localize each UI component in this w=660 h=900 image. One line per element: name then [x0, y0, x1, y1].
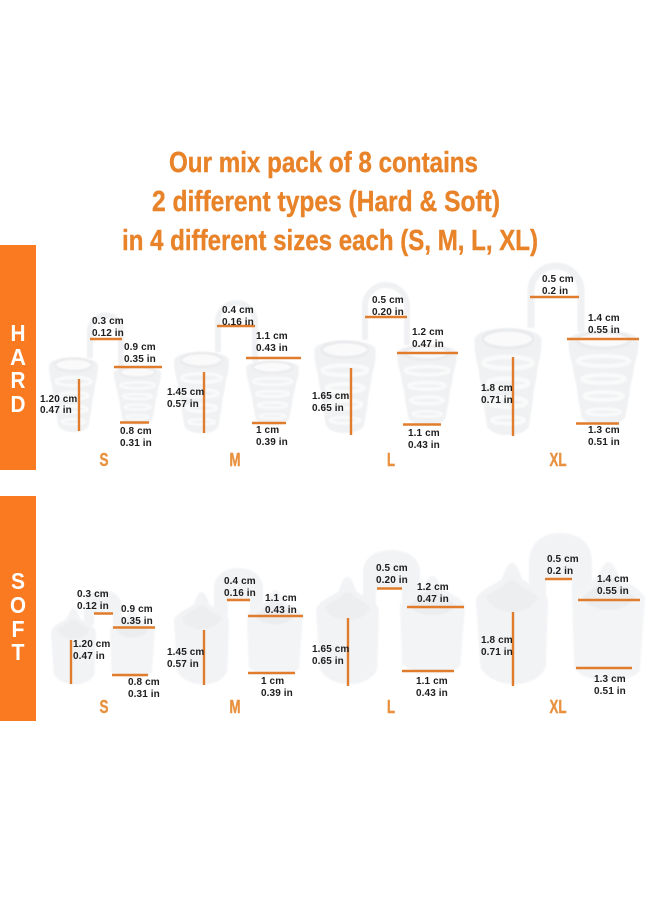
panel: SOFT side label: T	[12, 639, 24, 665]
size label: soft L: L	[387, 697, 395, 717]
size label: XL: XL	[550, 450, 566, 470]
dimensions: hard S: 0.3 cm	[92, 316, 124, 327]
dimensions: hard L: 0.65 in	[312, 403, 344, 414]
dimensions: hard M: 0.43 in	[256, 343, 288, 354]
panel: SOFT side label: S	[11, 568, 25, 594]
dimensions: soft M	[167, 576, 303, 699]
dimensions: hard M: 0.16 in	[222, 317, 254, 328]
dimensions: hard S: 0.9 cm	[124, 342, 156, 353]
dimensions: soft M: 0.43 in	[265, 605, 297, 616]
title: 2 different types (Hard & Soft)	[152, 186, 500, 218]
dimensions: hard XL: 1.8 cm	[481, 383, 513, 394]
dimensions: soft M: 0.16 in	[224, 588, 256, 599]
icon: hard L device	[314, 285, 457, 433]
dimensions: hard L	[312, 295, 458, 451]
dimensions: soft XL: 1.8 cm	[481, 635, 513, 646]
icon: hard M device	[174, 303, 299, 433]
panel: HARD side label: A	[10, 344, 26, 370]
dimensions: soft S: 0.9 cm	[121, 604, 153, 615]
dimensions: soft S: 0.12 in	[77, 601, 109, 612]
dimensions: hard L: 0.43 in	[408, 440, 440, 451]
panel: SOFT side label: F	[12, 616, 24, 642]
dimensions: hard L: 1.1 cm	[408, 428, 440, 439]
dimensions: soft M: 0.39 in	[261, 688, 293, 699]
panel: hard size S	[40, 315, 162, 470]
panel: hard size M	[167, 303, 301, 470]
dimensions: soft L	[312, 563, 464, 699]
dimensions: soft L: 0.65 in	[312, 656, 344, 667]
dimensions: hard XL	[481, 274, 639, 448]
dimensions: hard XL: 1.4 cm	[588, 313, 620, 324]
dimensions: hard S: 0.8 cm	[120, 426, 152, 437]
dimensions: hard XL: 0.51 in	[588, 437, 620, 448]
size label: soft M: M	[230, 697, 240, 717]
icon: hard S device	[49, 315, 161, 432]
dimensions: hard M: 1 cm	[256, 425, 279, 436]
dimensions: soft S: 1.20 cm	[73, 639, 110, 650]
icon: soft XL device	[476, 533, 645, 684]
dimensions: hard M: 0.39 in	[256, 437, 288, 448]
dimensions: soft S: 0.47 in	[73, 651, 105, 662]
dimensions: hard S: 0.35 in	[124, 354, 156, 365]
dimensions: hard XL: 0.71 in	[481, 395, 513, 406]
size label: soft S: S	[100, 697, 108, 717]
dimensions: hard L: 0.20 in	[372, 307, 404, 318]
dimensions: soft XL: 0.71 in	[481, 647, 513, 658]
dimensions: soft XL: 0.5 cm	[547, 554, 579, 565]
dimensions: soft XL: 0.2 in	[547, 566, 573, 577]
size label: L: L	[387, 450, 395, 470]
panel: soft size M	[167, 568, 303, 717]
dimensions: soft S: 0.3 cm	[77, 589, 109, 600]
dimensions: hard M: 0.57 in	[167, 399, 199, 410]
dimensions: hard M: 1.45 cm	[167, 387, 204, 398]
dimensions: hard M: 1.1 cm	[256, 331, 288, 342]
dimensions: hard L: 1.65 cm	[312, 391, 349, 402]
dimensions: soft XL: 1.3 cm	[594, 674, 626, 685]
panel: soft size S	[51, 589, 160, 717]
panel: HARD side label: H	[10, 320, 26, 346]
dimensions: hard M: 0.4 cm	[222, 305, 254, 316]
dimensions: soft L: 1.2 cm	[417, 582, 449, 593]
icon: soft M device	[174, 568, 303, 684]
dimensions: soft L: 1.1 cm	[416, 676, 448, 687]
dimensions: soft L: 0.20 in	[376, 575, 408, 586]
dimensions: soft L: 0.5 cm	[376, 563, 408, 574]
title: in 4 different sizes each (S, M, L, XL)	[122, 225, 538, 257]
dimensions: soft S: 0.8 cm	[128, 677, 160, 688]
size label: soft XL: XL	[550, 697, 566, 717]
size label: M: M	[230, 450, 240, 470]
panel: SOFT side label	[0, 496, 36, 721]
dimensions: soft M: 0.4 cm	[224, 576, 256, 587]
dimensions: soft L: 1.65 cm	[312, 644, 349, 655]
dimensions: soft L: 0.43 in	[416, 688, 448, 699]
dimensions: soft S: 0.31 in	[128, 689, 160, 700]
panel: soft size XL	[476, 533, 645, 717]
dimensions: soft S: 0.35 in	[121, 616, 153, 627]
icon: hard XL device	[474, 266, 639, 435]
dimensions: hard S	[40, 316, 162, 449]
icon: soft L device	[316, 550, 465, 684]
panel: hard size L	[312, 285, 458, 470]
dimensions: soft M: 1.45 cm	[167, 647, 204, 658]
dimensions: hard S: 0.47 in	[40, 405, 72, 416]
dimensions: hard M	[167, 305, 301, 448]
dimensions: hard XL: 0.5 cm	[542, 274, 574, 285]
dimensions: soft XL: 0.51 in	[594, 686, 626, 697]
dimensions: soft M: 0.57 in	[167, 659, 199, 670]
dimensions: hard XL: 0.2 in	[542, 286, 568, 297]
dimensions: hard S: 0.31 in	[120, 438, 152, 449]
dimensions: soft XL	[481, 554, 640, 697]
dimensions: hard L: 0.47 in	[412, 339, 444, 350]
title	[122, 147, 538, 257]
dimensions: hard L: 1.2 cm	[412, 327, 444, 338]
icon: soft S device	[51, 590, 155, 684]
panel: soft size L	[312, 550, 465, 717]
title: Our mix pack of 8 contains	[169, 147, 478, 179]
dimensions: soft M: 1.1 cm	[265, 593, 297, 604]
dimensions: hard L: 0.5 cm	[372, 295, 404, 306]
dimensions: hard XL: 1.3 cm	[588, 425, 620, 436]
dimensions: soft M: 1 cm	[261, 676, 284, 687]
dimensions: soft L: 0.47 in	[417, 594, 449, 605]
dimensions: hard S: 0.12 in	[92, 328, 124, 339]
panel: HARD side label	[0, 245, 36, 470]
panel: SOFT side label: O	[10, 592, 26, 618]
panel: hard size XL	[474, 266, 639, 470]
size label: S: S	[100, 450, 108, 470]
dimensions: soft S	[71, 589, 160, 700]
dimensions: soft XL: 1.4 cm	[597, 574, 629, 585]
dimensions: soft XL: 0.55 in	[597, 586, 629, 597]
panel: HARD side label: D	[10, 391, 26, 417]
dimensions: hard S: 1.20 cm	[40, 394, 77, 405]
dimensions: hard XL: 0.55 in	[588, 325, 620, 336]
panel: HARD side label: R	[10, 367, 26, 393]
